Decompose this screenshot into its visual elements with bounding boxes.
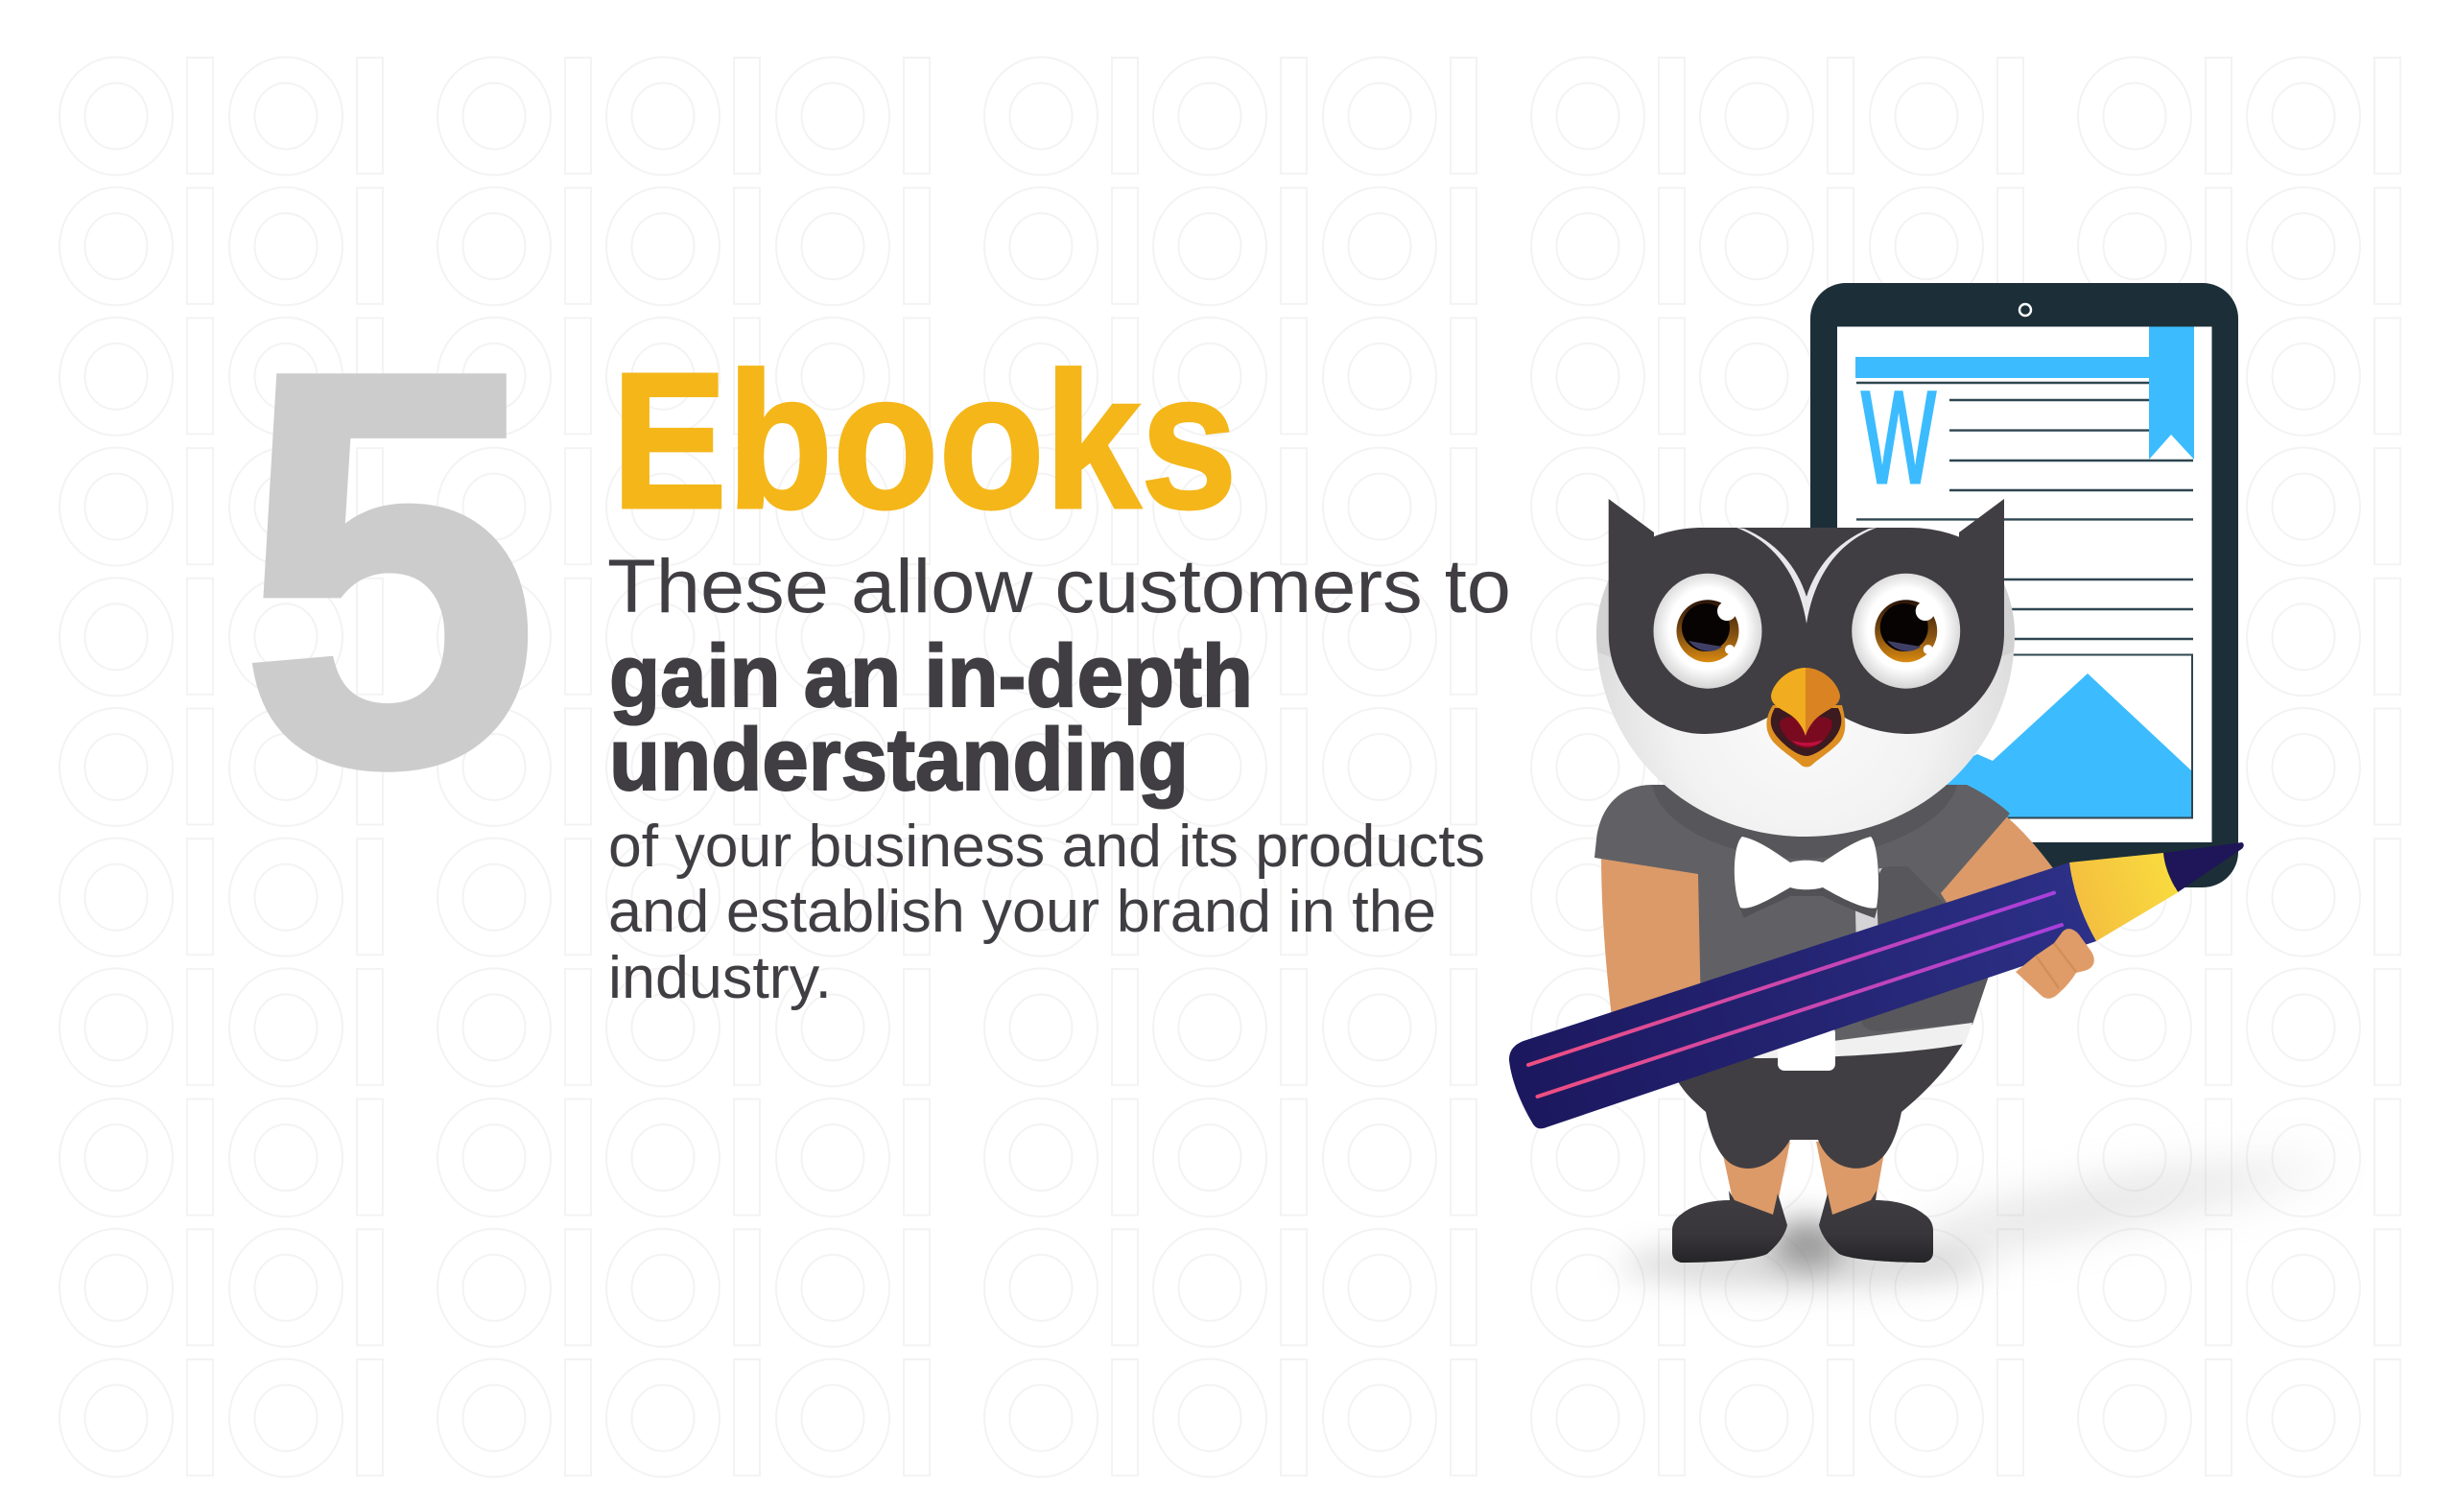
shirt (1594, 785, 2010, 1058)
text block: description: of your business and its products (608, 814, 1485, 880)
shoe right (1819, 1191, 1933, 1263)
shoe left (1672, 1191, 1787, 1263)
bookmark (2149, 326, 2194, 460)
arm left (1601, 854, 1703, 1017)
arm right (1941, 815, 2053, 907)
owl character (1509, 499, 2244, 1263)
mask (1609, 499, 2004, 734)
ground shadow (1621, 1167, 2341, 1288)
pencil (1509, 842, 2244, 1128)
bowtie (1735, 837, 1880, 918)
text block: description: These allow customers to (607, 543, 1511, 628)
tablet (1810, 283, 2238, 887)
camera (2019, 304, 2031, 316)
pencil wood (2069, 853, 2178, 941)
word W icon: W (1861, 365, 1936, 511)
neck shadow (1652, 785, 1957, 859)
heading: Ebooks: Ebooks (612, 332, 1238, 549)
belt buckle (1778, 1027, 1835, 1071)
pencil body (1509, 862, 2096, 1128)
document title bar (1855, 357, 2194, 378)
belt (1727, 1023, 1972, 1058)
pencil stripes (1528, 893, 2062, 1097)
shirt fold (1859, 866, 1988, 1031)
shorts (1674, 1041, 1965, 1169)
pencil tip (2163, 842, 2244, 892)
beak and mouth (1766, 668, 1845, 768)
head (1596, 566, 2015, 837)
text block: description: gain an in-depth (609, 627, 1253, 725)
eye right (1852, 574, 1960, 689)
document text lines (1856, 383, 2193, 639)
text block: description: industry. (608, 945, 832, 1011)
eye left (1654, 574, 1761, 689)
image placeholder (1856, 654, 2192, 817)
text block: description: and establish your brand in the (608, 879, 1436, 945)
legs (1720, 1142, 1886, 1217)
text block: description (607, 543, 1511, 1011)
text block: description: understanding (609, 711, 1189, 809)
hand (2016, 929, 2094, 999)
number 5: 5 (240, 255, 539, 882)
brow lines (1736, 528, 1877, 624)
